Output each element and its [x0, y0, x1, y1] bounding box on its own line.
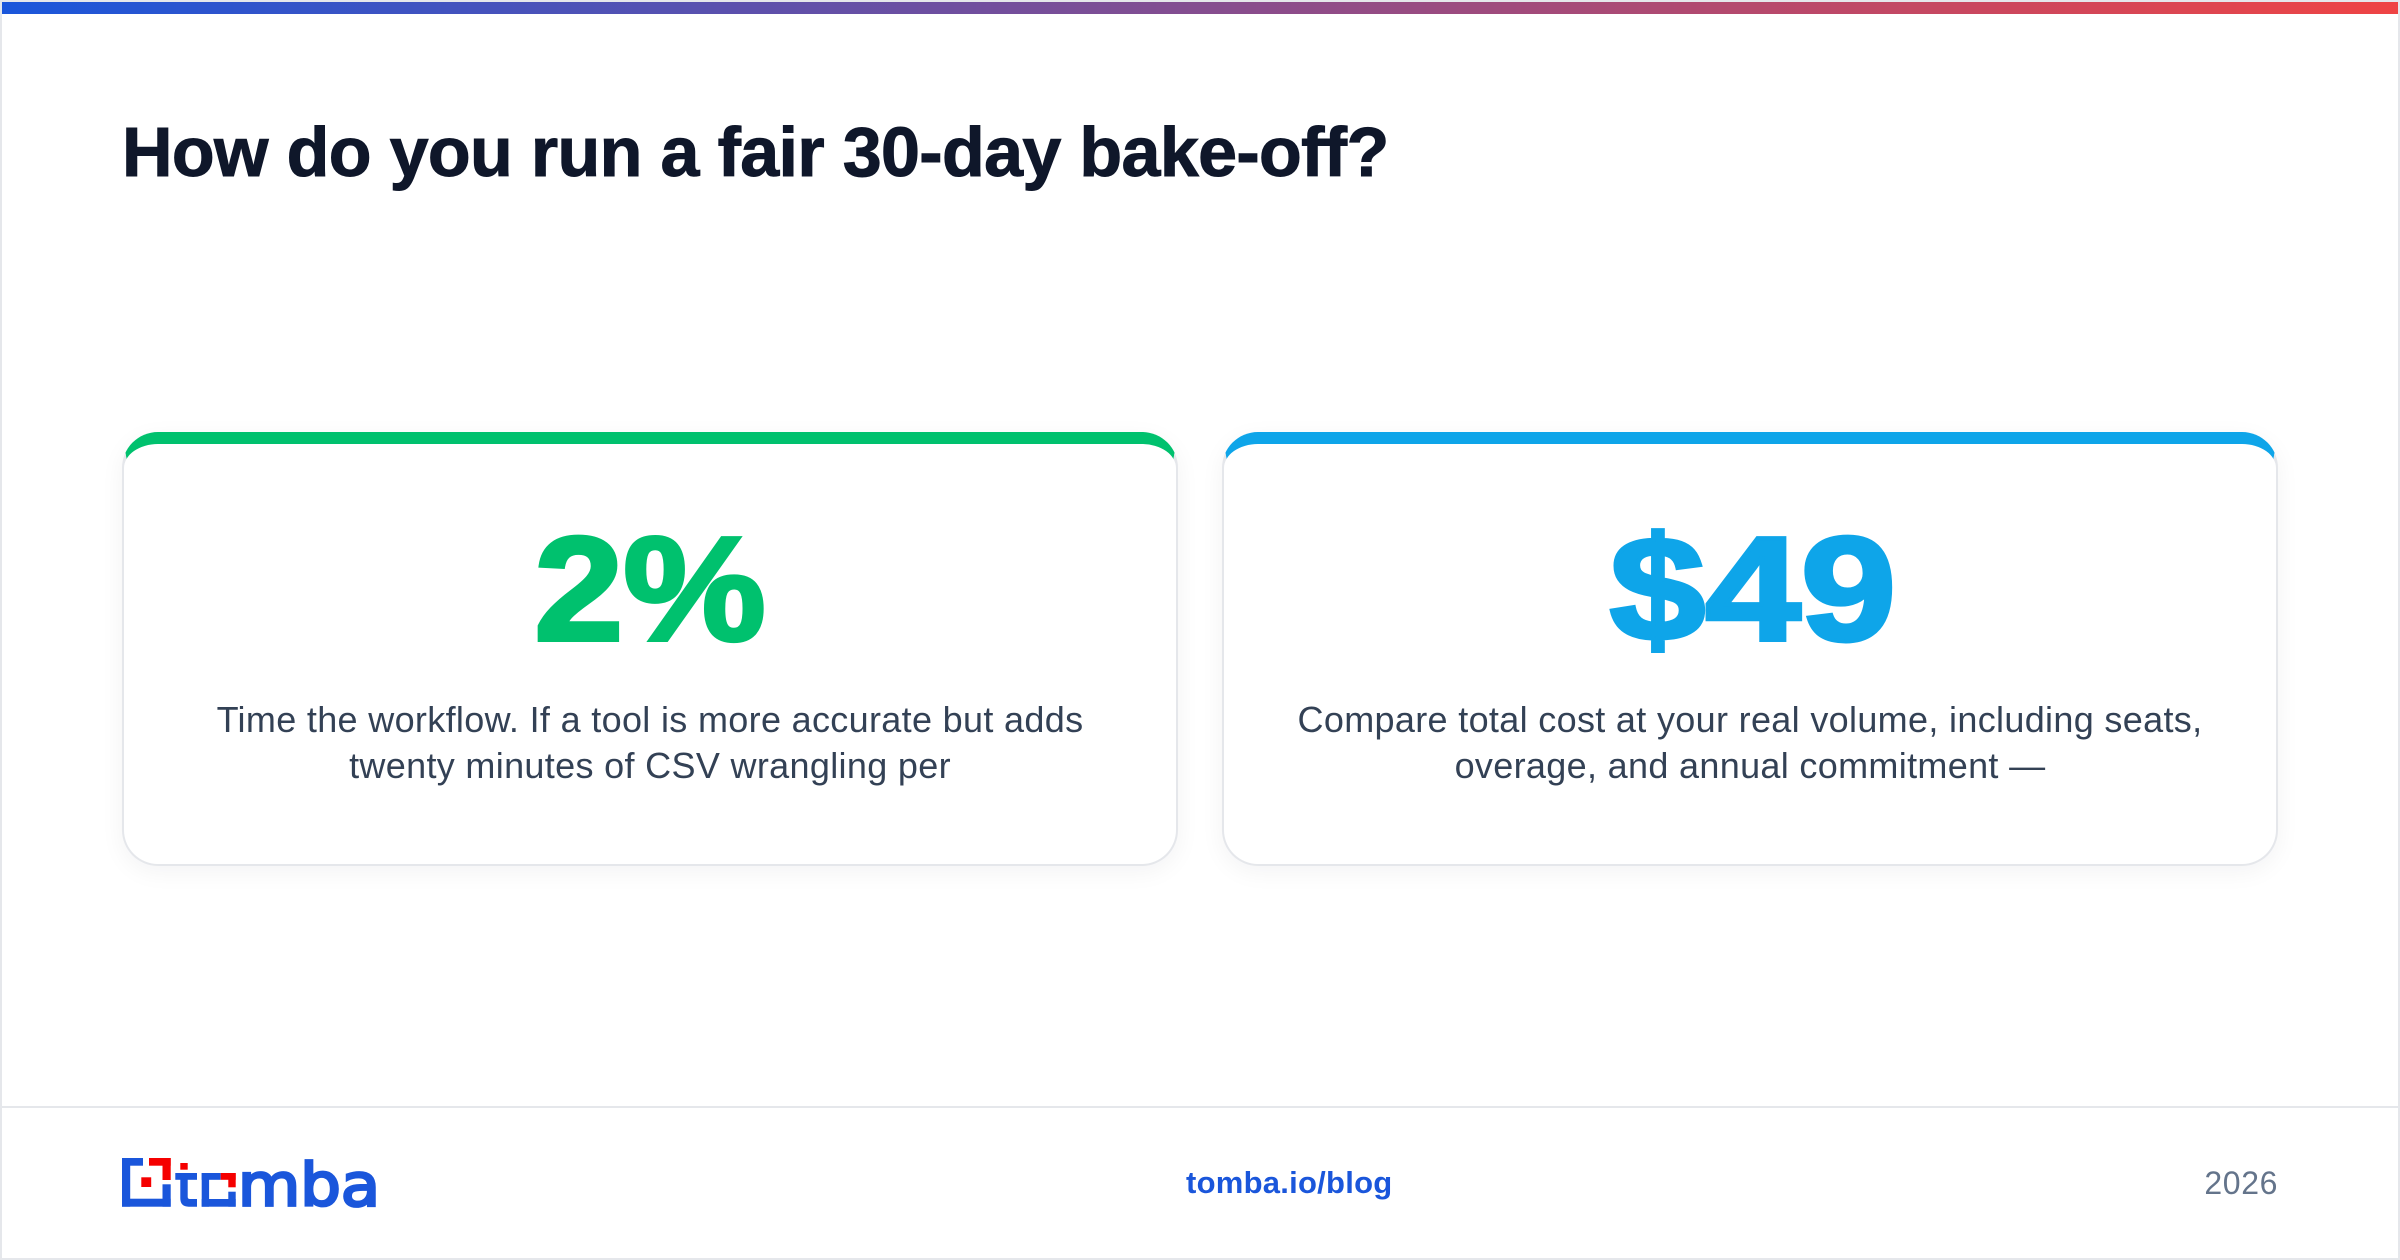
description: total cost: overage, and annual commitment — [1455, 745, 2045, 786]
panel: $49 stat card [1222, 432, 2278, 866]
panel: 2% stat card [122, 432, 1178, 866]
stat number: 2%: 2% [534, 506, 766, 672]
top gradient bar [2, 2, 2398, 14]
description: total cost [1298, 699, 2202, 786]
title: How do you run a fair 30-day bake-off? [122, 113, 1389, 191]
footer year: 2026 [2204, 1165, 2278, 1201]
description: total cost: Compare total cost at your real volume, including seats, [1298, 699, 2202, 740]
footer link: tomba.io/blog [1186, 1165, 1392, 1200]
icon: tomba logo: mba [238, 1151, 380, 1220]
description: workflow timing: Time the workflow. If a tool is more accurate but adds [217, 699, 1083, 740]
description: workflow timing: twenty minutes of CSV wrangling per [349, 745, 951, 786]
stat number: $49: $49 [1610, 506, 1896, 672]
icon: tomba logo [122, 1151, 380, 1220]
description: workflow timing [217, 699, 1083, 786]
